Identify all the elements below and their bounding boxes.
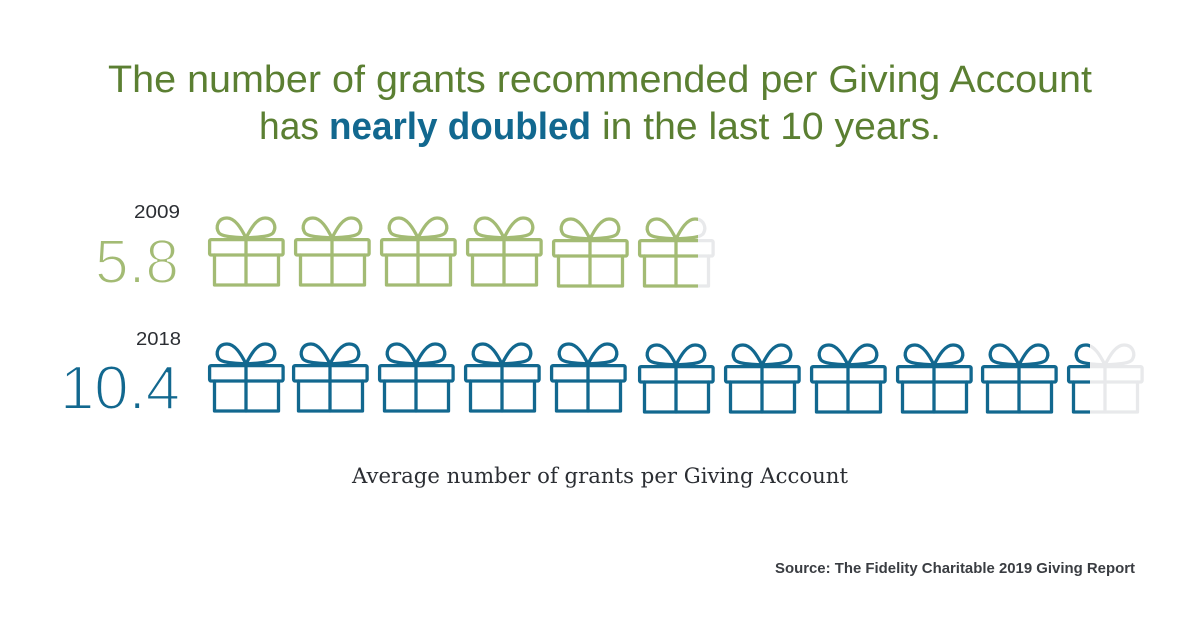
title: in the last 10 years. bbox=[602, 106, 941, 148]
value: 10.4: 10.4 bbox=[60, 354, 180, 423]
title: has bbox=[259, 106, 319, 148]
title: The number of grants recommended per Giving Account bbox=[108, 59, 1092, 101]
title bbox=[108, 59, 1092, 148]
label: year 2018: 2018 bbox=[136, 329, 181, 349]
label: year 2009: 2009 bbox=[134, 202, 180, 222]
source note: Source: The Fidelity Charitable 2019 Giving Report bbox=[775, 560, 1135, 577]
caption: Average number of grants per Giving Account bbox=[351, 464, 849, 488]
title: nearly doubled bbox=[329, 106, 591, 148]
icon row: blue gifts bbox=[210, 344, 1142, 412]
icon row: green gifts bbox=[210, 218, 713, 286]
row: 2009 bbox=[98, 205, 715, 288]
value: 5.8: 5.8 bbox=[95, 228, 179, 297]
row: 2018 bbox=[66, 332, 1144, 414]
